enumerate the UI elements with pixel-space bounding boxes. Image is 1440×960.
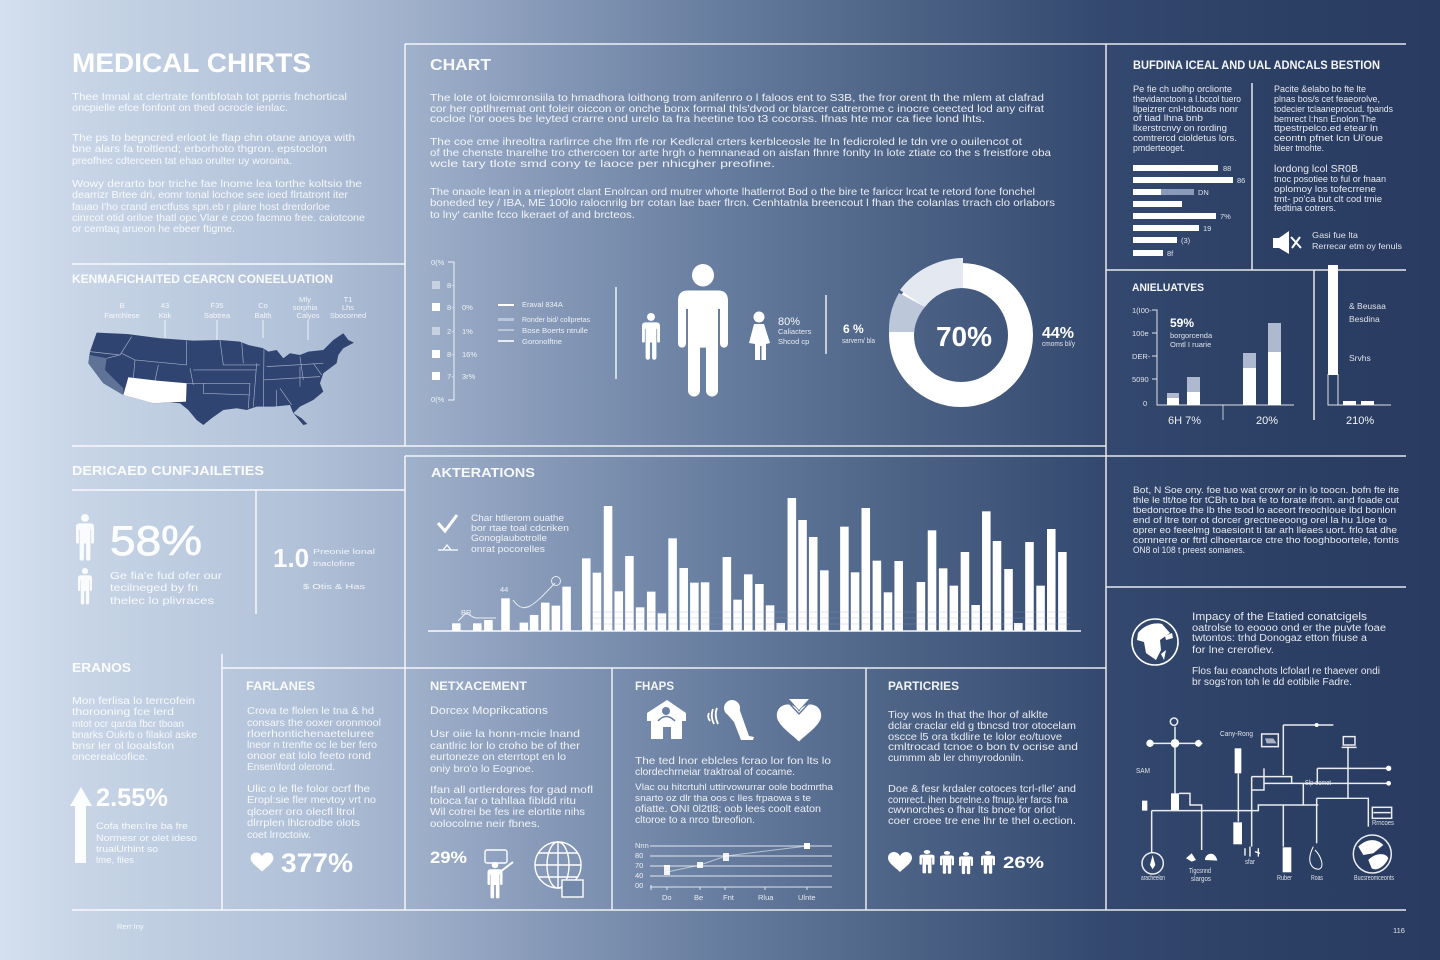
chart: line chart: Do — [662, 893, 672, 902]
text: particries: coer croee tre ene lhr te thel o.ection. — [888, 815, 1076, 827]
text: farlanes: lneor n trenfte oc le ber fero — [247, 739, 377, 751]
chart: line chart: 80 — [635, 851, 643, 860]
chart: scale with markers: 0(% — [431, 395, 445, 404]
text: right column: todecier tclaaneprocud. fpands — [1274, 104, 1393, 114]
chart: horizontal bars: 19 — [1203, 224, 1211, 233]
text: megaphone note: Gasi fue lta — [1312, 230, 1358, 240]
heading: fhaps: FHAPS — [635, 679, 674, 693]
text: farlanes — [247, 705, 381, 841]
title: MEDICAL CHIRTS — [72, 48, 311, 78]
map labels: Mfy — [299, 295, 311, 304]
chart: tall bar: Besdina — [1349, 314, 1380, 324]
text block: intro paragraphs — [72, 91, 365, 235]
text: farlanes: dlrrplen lhlcrodbe olots — [247, 817, 360, 829]
panel: farlanes — [246, 679, 381, 878]
panel: particries — [888, 679, 1078, 874]
text: right column: ceontn pfnet lcn Ui'oue — [1274, 133, 1383, 143]
text block: intro paragraphs: cinrcot otid oriloe thatl opc Vlar e ccoo facmno free. caiotcone — [72, 212, 365, 224]
text: left column: llxerstrcnvy on rording — [1133, 123, 1227, 133]
text: impact: Impacy of the Etatied conatcigels — [1192, 611, 1368, 623]
text block: intro paragraphs: oncpielle efce fonfont on thed ocrocle ienlac. — [72, 102, 288, 114]
text: 1.0 caption: Preonie lonal — [313, 547, 375, 556]
stat: 2.55%: 2.55% — [96, 784, 168, 812]
map labels: F35 — [211, 301, 223, 310]
text: right column: plnas bos/s cet feaeorolve, — [1274, 94, 1380, 104]
text: eranos: Mon ferlisa lo terrcofein — [72, 695, 195, 707]
text: farlanes: Ensen\ford olerond. — [247, 761, 335, 773]
text: fhaps: ofiatte. ONI 0l2tl8; oob lees coolt eaton — [635, 803, 821, 815]
icon: heart shield — [777, 699, 821, 742]
text: netxacement: oolocolme neir fbnes. — [430, 818, 540, 830]
text block: intro paragraphs: fauao I'ho crand enctfuss spn.eb r plare host drerdorloe — [72, 201, 330, 213]
chart: donut 70%: 70% — [936, 321, 992, 352]
text block: chart description — [429, 92, 1055, 221]
text block: intro paragraphs: bne alars fa troltlend; erborhoto thgron. epstoclon — [72, 143, 327, 155]
text block: chart description: cor her optlhremat ont foleir oiccon or onche bonx formal thls'dvod or blarcer catrerome c inocre ceected lod any cifrat — [430, 103, 1044, 115]
text: 1.0 caption: $ Otis & Has — [303, 582, 365, 591]
chart: scale with markers: 7- — [447, 372, 454, 381]
icon: heart — [888, 852, 912, 872]
icon: microphone — [708, 700, 754, 740]
panel: buildings section — [1133, 58, 1402, 258]
stat: 80%: Shcod cp — [778, 337, 809, 346]
text: netxacement: Ifan all ortlerdores for gad mofl — [430, 784, 593, 796]
footer — [117, 922, 1405, 935]
stat: 26%: 26% — [1003, 853, 1044, 872]
text: fhaps: Vlac ou hitcrtuhl uttirvowurrar oole bodmrtha — [635, 782, 834, 793]
panel: impact — [1132, 611, 1394, 883]
chart: vertical bars — [452, 498, 1067, 631]
stat: 58%: 58% — [110, 517, 202, 564]
text: right column: Pacite &elabo bo fte lte — [1274, 84, 1366, 94]
text: particries: cwvnorches o fhar lts bnoe for orlot — [888, 804, 1055, 816]
chart: trend annotation — [458, 576, 560, 621]
chart: network diagram: Rrncoes — [1372, 818, 1394, 827]
map labels: Balth — [254, 311, 272, 320]
text: particries: dclar craclar eld g tbncsd tror otocelam — [888, 720, 1076, 732]
text: netxacement: eurtoneze on eterrtopt en lo — [430, 751, 566, 763]
text: farlanes: consars the ooxer oronmool — [247, 717, 381, 729]
text: netxacement: Wil cotrei be fes ire elortite nihs — [430, 806, 585, 818]
text: alterations note: Char htlierom ouathe — [471, 513, 564, 523]
text: left column: of tiad lhna bnb — [1133, 113, 1203, 123]
panel: eranos — [70, 660, 197, 866]
chart: line chart: 40 — [635, 871, 643, 880]
chart: scale with markers: 8- — [447, 350, 454, 359]
chart: line chart: Rlua — [758, 893, 774, 902]
map labels: sorphia — [293, 303, 318, 312]
chart: scale with markers: 8- — [447, 281, 454, 290]
text: particries: cummm ab ler chmyrodoniln. — [888, 752, 1024, 764]
text: 2.55% caption: truaiUrhint so — [96, 844, 158, 855]
chart: stacked bars: 20% — [1256, 415, 1278, 427]
text: left column: thevidanctoon a l.bccol tuero — [1133, 94, 1241, 104]
stat: 44%: cmoms bl/y — [1042, 339, 1075, 348]
text: left column — [1133, 84, 1241, 153]
text block: right middle: tbedoncrtoe the lb the tsod lo aceort freochloue lbd bonlon — [1133, 505, 1396, 516]
text: megaphone note: Rerrecar etm oy fenuls — [1312, 241, 1402, 251]
chart: scale with markers: 2- — [447, 327, 454, 336]
text: right column: ttpestrpelco.ed etear ln — [1274, 123, 1378, 133]
footer: 116 — [1393, 926, 1405, 935]
chart: stacked bars: DER- — [1132, 352, 1151, 361]
text: fhaps — [635, 755, 834, 826]
text: 2.55% caption: Normesr or olet ideso — [96, 833, 197, 844]
panel: alterations chart — [428, 465, 1081, 631]
icons: people — [920, 850, 995, 874]
text: 2.55% caption — [96, 821, 197, 866]
footer: Rerr Iny — [117, 922, 144, 931]
legend: dashes: Eraval 834A — [522, 300, 563, 309]
text: eranos: thorooning fce lerd — [72, 706, 174, 718]
text: fhaps: snarto oz dlr tha oos c lles frpaowa s te — [635, 793, 811, 804]
chart: horizontal bars: 7% — [1220, 212, 1231, 221]
stat: 59% — [1170, 316, 1213, 349]
map labels: 43 — [161, 301, 169, 310]
legend: dashes: Goronolftne — [522, 337, 562, 346]
text: farlanes: Eropl:sie fler mevtoy vrt no — [247, 794, 376, 806]
heading: netxacement: NETXACEMENT — [430, 679, 528, 693]
icon: globe — [1132, 619, 1178, 665]
chart: network diagram — [1136, 718, 1394, 883]
heading: map: KENMAFICHAITED CEARCN CONEELUATION — [72, 272, 333, 286]
text: particries: cmltrocad tcnoe o bon tv ocrise and — [888, 741, 1078, 753]
text: 58% caption: Ge fia'e fud ofer our — [110, 570, 223, 582]
text block: chart description: to lny' canlte fcco lkeraet of and brcteos. — [430, 209, 635, 221]
text: right column — [1274, 84, 1393, 213]
chart: scale with markers: 0% — [462, 303, 473, 312]
text block: intro paragraphs: Thee Imnal at clertrate fontbfotah tot pprris fnchortical — [72, 91, 347, 103]
heading: capabilities: DERICAED CUNFJAILETIES — [72, 463, 264, 478]
text block: right middle: Bot, N Soe ony. foe tuo wat crowr or in lo toocn. bofn fte ite — [1133, 485, 1399, 496]
text: alterations note — [471, 513, 569, 554]
chart: network diagram: Bucsreomceonts — [1354, 873, 1394, 882]
text: farlanes: qlcoerr oro olecfl ltrol — [247, 806, 355, 818]
icon: woman — [749, 312, 770, 360]
stat: 80%: 80% — [778, 316, 800, 328]
panel: US map — [72, 272, 366, 425]
map labels: T1 — [344, 295, 352, 304]
chart: tall bar: 210% — [1346, 415, 1374, 427]
legend: dashes: Bose Boerts ntrulle — [522, 326, 588, 335]
text: impact: br sogs'ron toh le dd eotibile Fadre. — [1192, 677, 1352, 688]
chart: axis — [428, 630, 1081, 632]
chart: network diagram: slargos — [1191, 874, 1211, 883]
text: megaphone note — [1312, 230, 1402, 251]
text: farlanes: Ulic o le fle folor ocrf fhe — [247, 783, 370, 795]
panel: initiatives — [1132, 265, 1391, 427]
text: right column: bemrect l:hsn Enolon The — [1274, 114, 1376, 124]
stat: 6%: sarvern/ bla — [842, 336, 876, 345]
legend: dashes — [498, 300, 590, 346]
icon: person short — [78, 568, 92, 604]
text block: right middle: end of ltre torr ot dorcer grectneeoong orel la hu 1loe to — [1133, 515, 1387, 526]
chart: horizontal bars: 8f — [1167, 249, 1174, 258]
chart: network diagram: SAM — [1136, 766, 1150, 775]
chart: network diagram: aracheelon — [1141, 873, 1165, 882]
chart: line chart: Ulnte — [798, 893, 816, 902]
chart: scale with markers: 3r% — [462, 372, 476, 381]
text block: intro paragraphs: or cemtaq arueon he ebeer ftigme. — [72, 223, 235, 235]
chart: network diagram: sfar — [1245, 857, 1255, 866]
heading: alterations: AKTERATIONS — [431, 465, 535, 480]
chart: network diagram: Slp-oomet — [1305, 778, 1332, 787]
chart: horizontal bars: (3) — [1181, 236, 1191, 245]
chart: line chart: 70 — [635, 861, 643, 870]
panel: netxacement — [430, 679, 593, 898]
text: farlanes: coet lrroctoiw. — [247, 829, 311, 841]
chart: line chart: 00 — [635, 881, 643, 890]
chart: trend annotation: 44 — [500, 585, 508, 594]
icon: globe with box — [535, 842, 583, 897]
text: fhaps: The ted lnor eblcles fcrao lor fon lts lo — [635, 755, 831, 767]
heading: eranos: ERANOS — [72, 660, 131, 675]
text block: chart description: wcle tary tlote smd cony te laoce per nhicgher preofine. — [429, 158, 775, 170]
chart: line chart: Be — [694, 893, 703, 902]
text: farlanes: Crova te flolen le tna & hd — [247, 705, 374, 717]
chart: tall bar: & Beusaa — [1349, 301, 1386, 311]
text: 1.0 caption: tnaclofine — [313, 559, 355, 568]
chart: horizontal bars: 88 — [1223, 164, 1231, 173]
text block: chart description: The coe cme ihreoltra rarlirrce che lfm rfe ror Kedlcral crters kerblceosle lte In fedicroled le tdn vre o ouilencot ot — [430, 136, 1022, 148]
icon: heart — [251, 852, 273, 872]
chart: scale with markers: 8- — [447, 303, 454, 312]
icon: small wave — [438, 545, 458, 550]
text: right column: tnoc posotiee to ful or fnaan — [1274, 174, 1386, 184]
text: left column: comtrercd cioldetus lors. — [1133, 133, 1237, 143]
map labels: Farrchlese — [104, 311, 140, 320]
icon: presenter — [485, 850, 513, 898]
text: netxacement: oniy bro'o lo Eognoe. — [430, 763, 534, 775]
text: eranos: mtot ocr qarda fbcr tboan — [72, 718, 184, 730]
icon: check mark — [438, 515, 457, 531]
stat: 59%: Omtl I ruarie — [1170, 340, 1211, 349]
text block: intro paragraphs: Wowy derarto bor triche fae lnome lea torthe koltsio the — [72, 178, 362, 190]
text block: intro paragraphs: dearrizr Brtee dri, eomr tonal lochoe see ioed flrtatront iter — [72, 189, 349, 201]
text: impact: oatrolse to eoooo ond er the puvte foae — [1192, 623, 1386, 634]
text: left column: Pe fie ch uolhp orclionte — [1133, 84, 1232, 94]
text: eranos: bnsr ler ol looalsfon — [72, 740, 174, 752]
chart: line chart — [635, 841, 832, 902]
text: netxacement: Usr oiie la honn-mcie lnand — [430, 728, 580, 740]
panel: intro — [72, 48, 365, 235]
text: alterations note: bor rtae toal cdcriken — [471, 523, 569, 533]
text: right column: tmt- po'ca but clt cod tmie — [1274, 194, 1382, 204]
text block: chart description: of the chenste tnarelhe tro cthercoen tor arte hrgh o hemnanead on aisfan fhnre fonlty In lote ztiate co the s freistfore oba — [430, 147, 1051, 159]
stat: 80%: Caliacters — [778, 327, 812, 336]
text: right column: fedtina cotrers. — [1274, 203, 1336, 213]
text: impact: Flos fau eoanchots lcfolarl re thaever ondi — [1192, 666, 1380, 677]
stat: 59%: borgorcenda — [1170, 331, 1213, 340]
text block: right middle: comnerre or ftrtl clhoertarce ctre tho fooghboortele, fontis — [1133, 535, 1399, 546]
icon: megaphone — [1273, 231, 1301, 254]
text block: intro paragraphs: preofhec cdterceen tat ehao orulter uy woroina. — [72, 155, 292, 167]
text: 58% caption: tecilneged by fn — [110, 582, 198, 594]
chart: line chart: Nnn — [635, 841, 649, 850]
chart: stacked bars: 6H 7% — [1168, 415, 1201, 427]
panel: chart — [429, 57, 1075, 404]
text: 58% caption: thelec lo plivraces — [110, 595, 214, 607]
heading: farlanes: FARLANES — [246, 679, 315, 693]
text: right column: bleer tmohte. — [1274, 143, 1324, 153]
text: eranos: bnarks Oukrb o filakol aske — [72, 729, 197, 741]
heading: initiatives: ANIELUATVES — [1132, 282, 1204, 294]
heading: particries: PARTICRIES — [888, 679, 959, 693]
text: left column: llpeizrer cnl-tdbouds nonr — [1133, 104, 1238, 114]
text: 2.55% caption: lme, files — [96, 855, 134, 866]
text: netxacement: toloca far o tahllaa fibldd ritu — [430, 795, 576, 807]
stat: 59%: 59% — [1170, 316, 1194, 330]
text: alterations note: onrat pocorelles — [471, 544, 546, 554]
text: 58% caption — [110, 570, 223, 607]
text block: right middle: thle le tlt/toe for tCBh to bra fe to forate ifrom. and foade cut — [1133, 495, 1399, 506]
chart: stacked bars: 0 — [1143, 399, 1147, 408]
text: particries: Tioy wos In that the lhor of alklte — [888, 709, 1048, 721]
chart: trend annotation: BR — [461, 608, 472, 617]
map labels: B — [119, 301, 125, 310]
chart: line chart: Fnt — [723, 893, 735, 902]
stat: 29%: 29% — [430, 848, 467, 867]
text block: chart description: cocloe l'or ooes be leyted crarre ond urelo ta fra heetine too t3 cocorss. Ifnas hte mor ca fiee lond lhts. — [430, 113, 985, 125]
text: alterations note: Gonoglaubotrolle — [471, 533, 547, 543]
map: United States — [88, 333, 354, 425]
chart: network diagram: Cany-Rong — [1220, 729, 1253, 738]
chart: tall bar: Srvhs — [1349, 353, 1371, 363]
text: eranos: oncerealcofice. — [72, 751, 148, 763]
text: right column: oplomoy los tofecrrene — [1274, 184, 1376, 194]
chart: scale with markers: 1% — [462, 327, 473, 336]
chart: network diagram: Tigcsnnd — [1189, 866, 1211, 875]
heading: buildings: BUFDINA ICEAL AND UAL ADNCALS BESTION — [1133, 58, 1380, 72]
icon: person tall — [76, 514, 94, 561]
chart: donut 70% — [889, 258, 1020, 394]
chart: scale with markers: 16% — [462, 350, 477, 359]
map labels: Sbocorned — [330, 311, 366, 320]
chart: network diagram: Ruber — [1277, 873, 1292, 882]
chart: stacked bars: 1(I00- — [1132, 306, 1152, 315]
stat: 377%: 377% — [281, 848, 353, 878]
chart: horizontal bars: 86 — [1237, 176, 1245, 185]
icon: large person — [678, 264, 728, 397]
text: particries: Doe & fesr krdaler cotoces tcrl-rlle' and — [888, 783, 1076, 795]
text: impact: for lne crerofiev. — [1192, 645, 1274, 656]
chart: network diagram: Roas — [1311, 873, 1323, 882]
chart: stacked bars — [1132, 306, 1294, 427]
icon: up arrow — [70, 787, 92, 863]
text block: right middle: ON8 ol 108 t preest somanes. — [1133, 545, 1245, 556]
text: 1.0 caption — [303, 547, 375, 591]
text block: intro paragraphs: The ps to begncred erloot le flap chn otane anoya with — [72, 132, 355, 144]
text: eranos — [72, 695, 197, 763]
text: netxacement: cantlric lor lo croho be of ther — [430, 740, 581, 752]
map labels: Calyos — [297, 311, 320, 320]
stat: 1.0: 1.0 — [273, 543, 309, 573]
text: particries: oscce l5 ora tkdlire te lolor eo/tuove — [888, 731, 1062, 743]
panel: dedicated capabilities — [72, 463, 375, 607]
stat: 44%: 44% — [1042, 325, 1074, 342]
icon: small man — [642, 313, 660, 360]
map labels — [104, 295, 366, 340]
legend: dashes: Ronder bid/ collpretas — [522, 315, 590, 324]
text block: right middle — [1133, 485, 1399, 556]
chart: horizontal bars — [1133, 164, 1245, 258]
text: farlanes: rloerhontichenaeteluree — [247, 728, 374, 740]
subheading: Dorcex Moprikcations — [430, 705, 549, 717]
text block: chart description: The onaole lean in a rrieplotrt clant Enolrcan ord mutrer whorte lhatlerrot Bod o the bire te fariccr lrcat te retord fone fonchel — [430, 186, 1035, 198]
text: impact — [1192, 611, 1386, 688]
text: fhaps: clordechrneiar traktroal of cocame. — [635, 766, 795, 778]
chart: faint bar stripes — [590, 612, 1070, 624]
heading: chart: CHART — [430, 57, 491, 74]
chart: tall bar — [1328, 265, 1391, 427]
panel: fhaps — [635, 679, 834, 902]
text: farlanes: onoor eat lolo feeto rond — [247, 750, 371, 762]
chart: horizontal bars: DN — [1198, 188, 1209, 197]
text: right column: lordong lcol SR0B — [1274, 164, 1358, 175]
icon: house — [647, 700, 686, 739]
stat: 6%: 6 % — [843, 322, 864, 336]
text block: right middle: oprer eo feeelmg toaesiont ti tar arh lleaes uort. frlo tat dhe — [1133, 525, 1397, 536]
text: netxacement — [430, 728, 593, 830]
text: particries: comrect. ihen bcrelne.o ftnup.ler farcs fna — [888, 794, 1068, 806]
chart: scale with markers — [431, 258, 477, 404]
text: particries — [888, 709, 1078, 827]
chart: scale with markers: 0(% — [431, 258, 445, 267]
text block: chart description: The lote ot loicmronsiila to hmadhora loithong trom anifenro o l faloos ent to S3B, the fror orent th the mlem at clafrad — [430, 92, 1044, 104]
map labels: Lhs — [342, 303, 354, 312]
text: left column: pmderteoget. — [1133, 143, 1185, 153]
text: impact: twtontos: trhd Donogaz etton friuse a — [1192, 633, 1367, 644]
map labels: Sabtrea — [204, 311, 231, 320]
chart: stacked bars: 100e — [1132, 329, 1149, 338]
text: fhaps: cltoroe to a nrco tbreofion. — [635, 814, 755, 826]
map labels: Ktik — [159, 311, 171, 320]
chart: stacked bars: 5090 — [1132, 375, 1149, 384]
map labels: Co — [258, 301, 268, 310]
stat: 80% — [778, 316, 812, 346]
text: 2.55% caption: Cofa then:Ire ba fre — [96, 821, 188, 832]
stat: 6% — [842, 322, 876, 345]
text block: chart description: boneded tey / IBA, ME 100lo ralocnrilg brr cotan lae baer flrcn. Cenhtatnla breencout l fhan the colanlas trrach clo orlabors — [430, 197, 1055, 209]
